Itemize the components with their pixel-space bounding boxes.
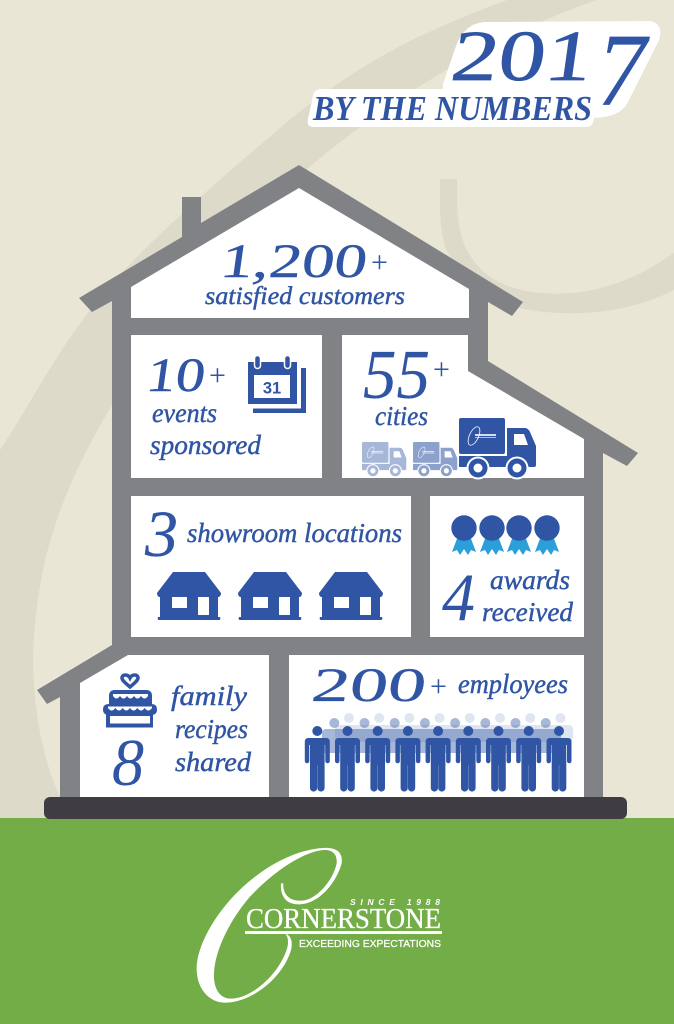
employees label: employees xyxy=(458,669,568,699)
title xyxy=(308,13,660,128)
customers number xyxy=(217,235,388,288)
showrooms number: 3 xyxy=(144,498,178,571)
logo since line: SINCE 1988 xyxy=(350,897,440,907)
customers label: satisfied customers xyxy=(205,283,405,310)
panel: events: sponsored xyxy=(150,430,261,460)
panel: showrooms xyxy=(131,496,411,637)
events number xyxy=(143,349,226,402)
icon: showroom 2 xyxy=(238,572,302,620)
background swirl xyxy=(0,0,674,818)
icon: small truck 1 xyxy=(362,442,406,477)
customers number: 1,200 xyxy=(217,235,371,288)
title subtitle: BY THE NUMBERS xyxy=(312,89,592,128)
panel: recipes xyxy=(80,655,269,800)
panel: employees xyxy=(289,655,584,797)
title year: 7 xyxy=(597,13,651,128)
icon: cake xyxy=(103,675,157,728)
cities number: + xyxy=(433,353,450,386)
icon: calendar: 31 xyxy=(263,380,281,398)
cities label: cities xyxy=(375,401,428,431)
recipes number: 8 xyxy=(112,726,144,800)
employees number xyxy=(308,659,447,712)
panel: cities xyxy=(342,335,584,480)
awards number: 4 xyxy=(442,559,475,635)
icon: middle row people xyxy=(322,718,561,753)
logo script C xyxy=(197,848,342,1003)
recipes label: family xyxy=(171,681,247,711)
title halo xyxy=(308,21,660,127)
logo: Cornerstone xyxy=(197,848,442,1003)
title year: 201 xyxy=(447,16,598,96)
employees number: + xyxy=(430,670,447,703)
icon: back row people xyxy=(335,713,573,742)
employees number: 200 xyxy=(308,659,430,712)
icon: small truck 2 xyxy=(413,442,457,477)
icon: large truck xyxy=(459,418,536,480)
awards label: awards xyxy=(490,565,570,595)
panel: events xyxy=(131,335,322,478)
ground xyxy=(0,818,674,1024)
panel: recipes: shared xyxy=(175,747,252,777)
events number: + xyxy=(209,359,226,392)
customers number: + xyxy=(371,246,388,279)
logo wordmark: CORNERSTONE xyxy=(246,904,441,935)
panel: recipes: recipes xyxy=(175,714,248,744)
panel: customers xyxy=(131,188,469,318)
icon: showroom 1 xyxy=(157,572,221,620)
icon: showroom 3 xyxy=(319,572,383,620)
house structure xyxy=(37,165,638,800)
logo tagline: EXCEEDING EXPECTATIONS xyxy=(299,938,441,950)
icon: calendar xyxy=(248,356,306,413)
cities number: 55 xyxy=(363,337,430,414)
panel: awards xyxy=(430,496,584,637)
title year xyxy=(447,13,651,128)
events label: events xyxy=(152,398,217,428)
events number: 10 xyxy=(143,349,209,402)
foundation xyxy=(44,797,627,819)
panel: awards: received xyxy=(482,597,573,627)
icon: award ribbons xyxy=(451,515,560,555)
icon: front row people xyxy=(305,726,572,792)
showrooms label: showroom locations xyxy=(187,518,402,548)
